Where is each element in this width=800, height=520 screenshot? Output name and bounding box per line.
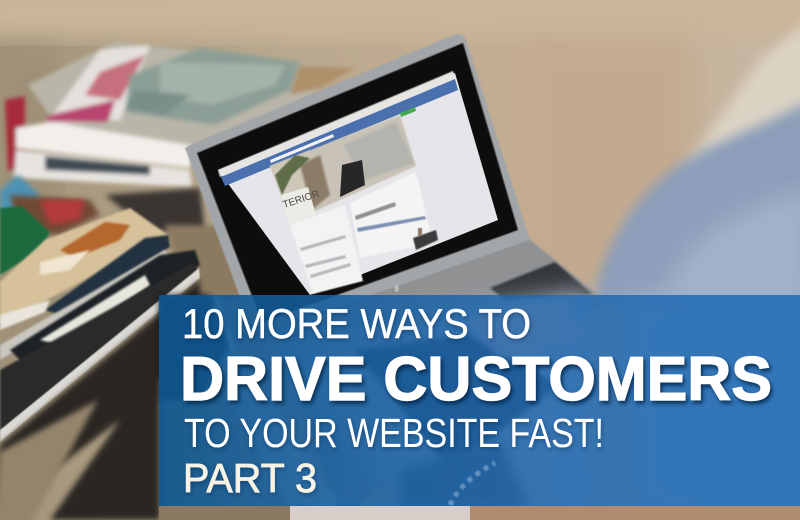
green button xyxy=(400,107,416,117)
windows logo xyxy=(394,284,399,292)
photo: dark table and lower magazines xyxy=(0,175,250,520)
photo: person in blue shirt on right xyxy=(592,20,800,310)
green plant xyxy=(275,155,310,195)
line: drive customers: DRIVE CUSTOMERS xyxy=(180,345,772,414)
laptop xyxy=(185,34,605,520)
photo: magazine stack top left xyxy=(5,42,355,187)
laptop black bezel xyxy=(197,43,518,322)
line: 10 more ways to: 10 MORE WAYS TO xyxy=(182,300,531,347)
laptop keyboard deck xyxy=(270,236,605,520)
title text xyxy=(180,300,772,501)
line: to your website fast: TO YOUR WEBSITE FAST! xyxy=(184,410,604,456)
browser chrome bar xyxy=(218,71,455,177)
left page column xyxy=(290,205,363,294)
blue title banner xyxy=(159,295,800,506)
facebook blue header xyxy=(221,79,458,186)
profile logo box xyxy=(281,187,316,225)
camera thumbnail xyxy=(413,230,438,250)
facebook screen xyxy=(218,73,498,295)
laptop: TERIOR xyxy=(282,189,321,211)
right page column xyxy=(350,172,433,258)
photo: hand and shirt behind banner xyxy=(159,290,800,520)
line: part 3: PART 3 xyxy=(183,455,317,501)
laptop silver lid xyxy=(185,34,530,330)
cover photo xyxy=(270,115,416,222)
search bar xyxy=(270,134,334,163)
dark tablet in cover xyxy=(340,160,365,197)
bracelet xyxy=(450,463,495,505)
